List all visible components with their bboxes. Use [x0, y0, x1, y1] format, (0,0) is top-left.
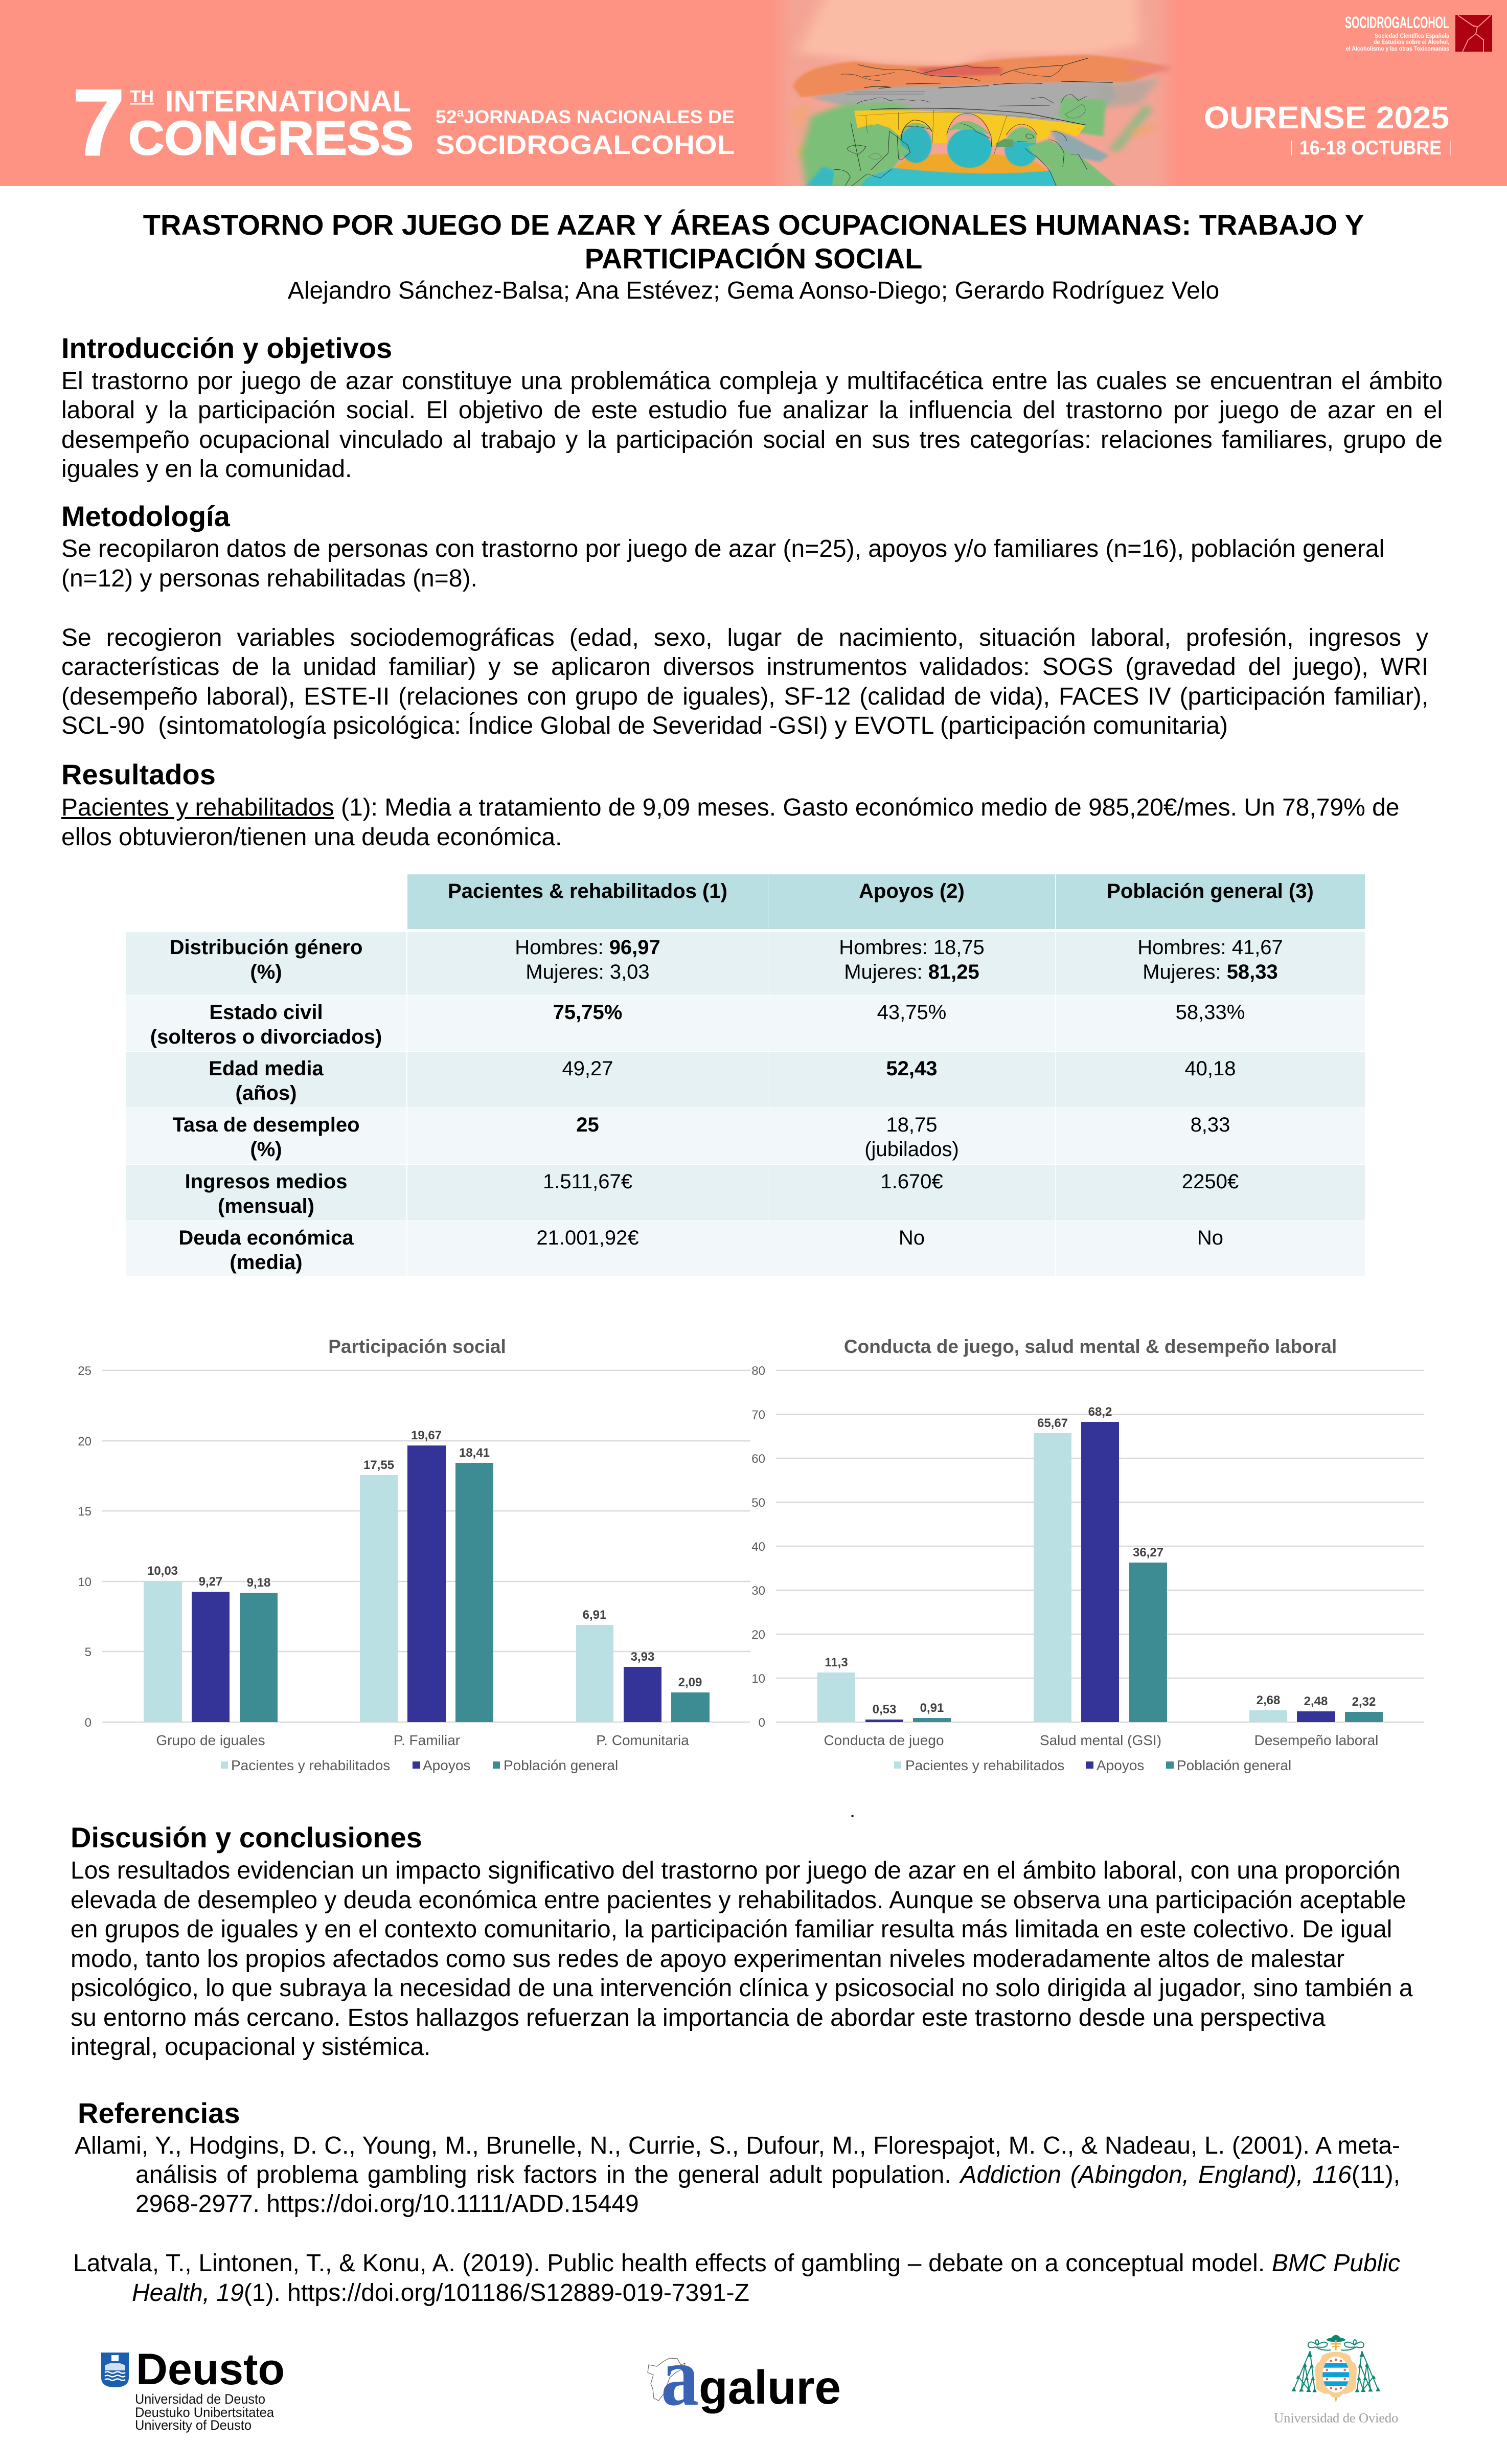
text: discusión: psicológico, lo que subraya la necesidad de una intervención clínica y psicosocial no solo dirigida al jugador, sino también a	[71, 1975, 1413, 2002]
y axis labels: 0	[85, 1716, 92, 1730]
row: deuda económica: Deuda económica	[178, 1227, 354, 1249]
text: discusión: Los resultados evidencian un impacto significativo del trastorno por juego de azar en el ámbito laboral, con una proporción	[71, 1857, 1401, 1884]
row: distribución género: Mujeres: 58,33	[1143, 961, 1278, 983]
place and dates: OURENSE 2025	[1204, 100, 1449, 135]
society logo: Sociedad Científica Española	[1375, 32, 1449, 39]
y axis labels	[751, 1364, 765, 1730]
text: metodología variables: Se recogieron variables sociodemográficas (edad, sexo, lugar de nacimiento, situación laboral, profesión, ingresos y	[61, 624, 1428, 651]
row: deuda económica: 21.001,92€	[536, 1227, 639, 1249]
row: distribución género: Mujeres: 81,25	[844, 961, 979, 983]
row: ingresos medios: Ingresos medios	[185, 1170, 347, 1193]
row: tasa de desempleo: 18,75	[886, 1114, 938, 1136]
data labels: 0,53	[873, 1703, 896, 1716]
category labels	[156, 1732, 689, 1748]
data labels: 3,93	[631, 1650, 654, 1664]
table header	[407, 874, 1365, 929]
society logo: de Estudios sobre el Alcohol,	[1374, 38, 1449, 46]
society logo: el Alcoholismo y las otras Toxicomanías	[1346, 45, 1449, 52]
congress title	[73, 70, 414, 175]
icon: Deusto shield	[101, 2353, 129, 2387]
row: distribución género: Distribución género	[170, 936, 362, 959]
row: ingresos medios: 1.511,67€	[543, 1170, 632, 1193]
text: metodología variables: SCL-90 (sintomatología psicológica: Índice Global de Severidad -GSI) y EVOTL (participación comunitaria)	[61, 712, 1228, 739]
jornadas text: 52ªJORNADAS NACIONALES DE	[436, 106, 735, 127]
place and dates	[1204, 100, 1451, 159]
row: distribución género: Mujeres: 3,03	[526, 961, 650, 983]
illustration: bridge landscape	[781, 0, 1170, 186]
row: estado civil	[126, 996, 1365, 1051]
data labels: 10,03	[147, 1564, 178, 1578]
row: tasa de desempleo: (%)	[250, 1138, 282, 1161]
wordmark galure: galure	[699, 2361, 841, 2414]
row: distribución género	[126, 932, 1365, 995]
icon: shield and cords	[1291, 2335, 1380, 2404]
row: tasa de desempleo: (jubilados)	[864, 1138, 959, 1161]
jornadas text: SOCIDROGALCOHOL	[436, 130, 735, 160]
y axis labels: 20	[78, 1435, 92, 1449]
congress title: 7	[73, 70, 125, 175]
bar chart: participación social	[78, 1336, 750, 1773]
reference 1: 2968-2977. https://doi.org/10.1111/ADD.15449	[135, 2190, 639, 2218]
row: distribución género: Hombres: 41,67	[1137, 936, 1283, 959]
table header: Población general (3)	[1107, 880, 1314, 902]
text: resultados: Pacientes y rehabilitados (1): Media a tratamiento de 9,09 meses. Gasto económico medio de 985,20€/mes. Un 78,79% de	[61, 794, 1399, 821]
congress title: CONGRESS	[128, 111, 414, 165]
data labels: 65,67	[1037, 1416, 1068, 1430]
y axis labels: 25	[78, 1364, 92, 1378]
row: distribución género: Hombres: 18,75	[839, 936, 985, 959]
wordmark: Universidad de Oviedo	[1274, 2410, 1398, 2425]
y axis labels	[78, 1364, 92, 1730]
header banner	[0, 0, 1507, 186]
y axis labels: 20	[751, 1628, 765, 1642]
data labels: 36,27	[1133, 1546, 1163, 1559]
reference 2	[0, 2249, 1507, 2310]
data labels: 2,32	[1352, 1695, 1376, 1709]
category labels: P. Comunitaria	[596, 1732, 689, 1748]
data labels: 2,68	[1257, 1693, 1280, 1707]
row: estado civil: Estado civil	[209, 1001, 323, 1024]
row: deuda económica: No	[1197, 1227, 1223, 1249]
reference 1: análisis of problema gambling risk factors in the general adult population. Addiction (Abingdon, England), 116(11),	[135, 2161, 1400, 2188]
row: edad media: 52,43	[886, 1057, 938, 1080]
table header: Pacientes & rehabilitados (1)	[448, 880, 727, 902]
data labels	[147, 1429, 702, 1689]
text: discusión: elevada de desempleo y deuda económica entre pacientes y rehabilitados. Aunque se observa una participación aceptable	[71, 1887, 1406, 1913]
row: ingresos medios: 1.670€	[880, 1170, 943, 1193]
data labels: 6,91	[583, 1608, 606, 1622]
y axis labels: 60	[751, 1452, 765, 1466]
data labels: 18,41	[459, 1446, 490, 1460]
text: introducción: laboral y la participación social. El objetivo de este estudio fue analizar la influencia del trastorno por juego de azar en el	[61, 397, 1443, 424]
legend: Pacientes y rehabilitados	[905, 1757, 1064, 1773]
text: discusión: en grupos de iguales y en el contexto comunitario, la participación familiar resulta más limitada en este colectivo. De igual	[71, 1916, 1392, 1943]
heading: referencias: Referencias	[78, 2097, 240, 2129]
text: metodología variables: características de la unidad familiar) y se aplicaron diversos instrumentos validados: SOGS (gravedad del juego), WRI	[61, 653, 1428, 681]
legend	[894, 1757, 1291, 1773]
row: edad media: Edad media	[209, 1057, 324, 1080]
row: edad media: (años)	[235, 1082, 296, 1104]
stray dot: .	[850, 1799, 855, 1822]
reference 2: Health, 19(1). https://doi.org/101186/S12889-019-7391-Z	[132, 2279, 749, 2307]
logo: agalure	[642, 2352, 846, 2418]
y axis labels: 30	[751, 1584, 765, 1598]
row: deuda económica: No	[899, 1227, 925, 1249]
heading: resultados: Resultados	[61, 758, 216, 790]
chart title: Participación social	[328, 1336, 506, 1357]
authors: Alejandro Sánchez-Balsa; Ana Estévez; Gema Aonso-Diego; Gerardo Rodríguez Velo	[288, 277, 1219, 304]
data labels: 2,09	[678, 1676, 702, 1689]
legend: Apoyos	[1097, 1757, 1144, 1773]
bar chart: conducta de juego, salud mental y desempeño laboral	[751, 1336, 1424, 1773]
congress title: INTERNATIONAL	[165, 85, 411, 118]
table header: Apoyos (2)	[859, 880, 965, 902]
text: introducción: iguales y en la comunidad.	[61, 456, 352, 483]
legend: Pacientes y rehabilitados	[231, 1757, 390, 1773]
y axis labels: 10	[78, 1575, 92, 1589]
data labels: 2,48	[1304, 1694, 1328, 1708]
text: metodología variables: (desempeño laboral), ESTE-II (relaciones con grupo de iguales), SF-12 (calidad de vida), FACES IV (participación familiar),	[61, 683, 1428, 710]
place and dates: 16-18 OCTUBRE	[1299, 137, 1442, 159]
category labels: Salud mental (GSI)	[1040, 1732, 1161, 1748]
heading: metodología: Metodología	[61, 500, 230, 532]
legend: Población general	[1177, 1757, 1291, 1773]
row: tasa de desempleo: 8,33	[1191, 1114, 1230, 1136]
sublines: University of Deusto	[135, 2417, 252, 2433]
text: metodología muestra: Se recopilaron datos de personas con trastorno por juego de azar (n=25), apoyos y/o familiares (n=16), población general	[61, 535, 1384, 562]
text: introducción	[61, 368, 1443, 483]
y axis labels: 40	[751, 1540, 765, 1554]
row: tasa de desempleo: 25	[576, 1114, 599, 1136]
category labels: Conducta de juego	[824, 1732, 944, 1748]
bars	[144, 1445, 710, 1722]
row: estado civil: 43,75%	[877, 1001, 946, 1024]
y axis labels: 70	[751, 1408, 765, 1422]
congress title: TH	[130, 87, 154, 106]
reference 1: Allami, Y., Hodgins, D. C., Young, M., Brunelle, N., Currie, S., Dufour, M., Florespajot, M. C., & Nadeau, L. (2001). A meta-	[75, 2132, 1400, 2159]
y axis labels: 50	[751, 1496, 765, 1510]
row: tasa de desempleo	[126, 1108, 1365, 1164]
data labels: 9,18	[247, 1576, 270, 1590]
data labels: 17,55	[363, 1458, 394, 1472]
category labels: Desempeño laboral	[1254, 1732, 1378, 1748]
row: edad media: 40,18	[1184, 1057, 1236, 1080]
row: ingresos medios: (mensual)	[218, 1195, 314, 1217]
text: discusión: su entorno más cercano. Estos hallazgos refuerzan la importancia de abordar este trastorno desde una perspectiva	[71, 2004, 1326, 2031]
row: estado civil: (solteros o divorciados)	[150, 1026, 382, 1048]
row: tasa de desempleo: Tasa de desempleo	[172, 1114, 360, 1136]
text: metodología muestra: (n=12) y personas rehabilitadas (n=8).	[61, 564, 477, 592]
y axis labels: 5	[85, 1645, 92, 1659]
category labels: P. Familiar	[394, 1732, 460, 1748]
reference 1	[75, 2132, 1400, 2218]
row: distribución género: (%)	[250, 961, 282, 983]
text: resultados: ellos obtuvieron/tienen una deuda económica.	[61, 823, 562, 851]
category labels: Grupo de iguales	[156, 1732, 265, 1748]
text: introducción: desempeño ocupacional vinculado al trabajo y la participación social en sus tres categorías: relaciones familiares, grupo de	[61, 426, 1443, 454]
row: ingresos medios: 2250€	[1182, 1170, 1239, 1193]
legend: Apoyos	[423, 1757, 470, 1773]
jornadas text	[436, 106, 735, 160]
data labels: 11,3	[825, 1656, 848, 1669]
row: estado civil: 75,75%	[553, 1001, 622, 1024]
row: estado civil: 58,33%	[1176, 1001, 1245, 1024]
y axis labels: 10	[751, 1672, 765, 1686]
logo: Universidad de Oviedo	[1274, 2335, 1398, 2425]
heading: introducción: Introducción y objetivos	[61, 332, 392, 364]
reference 2: Latvala, T., Lintonen, T., & Konu, A. (2019). Public health effects of gambling – debate on a conceptual model. BMC Public	[73, 2250, 1400, 2277]
legend: Población general	[504, 1757, 618, 1773]
data labels: 0,91	[920, 1701, 944, 1715]
poster title: TRASTORNO POR JUEGO DE AZAR Y ÁREAS OCUPACIONALES HUMANAS: TRABAJO Y	[143, 209, 1364, 241]
sublines: Deustuko Unibertsitatea	[135, 2405, 275, 2420]
table: características por grupo	[126, 874, 1365, 1276]
legend	[221, 1757, 618, 1773]
bars	[817, 1422, 1383, 1722]
poster title: PARTICIPACIÓN SOCIAL	[585, 242, 922, 275]
poster title	[143, 209, 1364, 275]
row: distribución género: Hombres: 96,97	[515, 936, 660, 959]
data labels: 19,67	[411, 1429, 442, 1442]
row: deuda económica: (media)	[230, 1251, 303, 1274]
sublines: Universidad de Deusto	[135, 2391, 265, 2407]
y axis labels: 80	[751, 1364, 765, 1378]
row: deuda económica	[126, 1221, 1365, 1276]
text: discusión: modo, tanto los propios afectados como sus redes de apoyo experimentan niveles moderadamente altos de malestar	[71, 1945, 1344, 1973]
text: metodología muestra	[61, 535, 1384, 592]
text: introducción: El trastorno por juego de azar constituye una problemática compleja y multifacética entre las cuales se encuentran el ámbito	[61, 368, 1443, 395]
y axis labels: 15	[78, 1505, 92, 1519]
heading: discusión: Discusión y conclusiones	[71, 1821, 422, 1853]
row: ingresos medios	[126, 1165, 1365, 1220]
data labels	[825, 1405, 1376, 1716]
text: metodología variables	[61, 624, 1428, 739]
data labels: 9,27	[199, 1575, 222, 1589]
text: resultados	[61, 794, 1399, 851]
data labels: 68,2	[1088, 1405, 1112, 1419]
society logo	[1345, 13, 1492, 52]
sublines	[135, 2391, 275, 2433]
Galicia outline	[648, 2358, 685, 2401]
y axis labels: 0	[759, 1716, 765, 1730]
text: discusión: integral, ocupacional y sistémica.	[71, 2033, 430, 2061]
chart title: Conducta de juego, salud mental & desempeño laboral	[844, 1336, 1337, 1357]
row: edad media: 49,27	[562, 1057, 613, 1080]
row: edad media	[126, 1052, 1365, 1107]
category labels	[824, 1732, 1378, 1748]
logo: Deusto	[97, 2347, 291, 2439]
text: discusión	[71, 1857, 1413, 2061]
